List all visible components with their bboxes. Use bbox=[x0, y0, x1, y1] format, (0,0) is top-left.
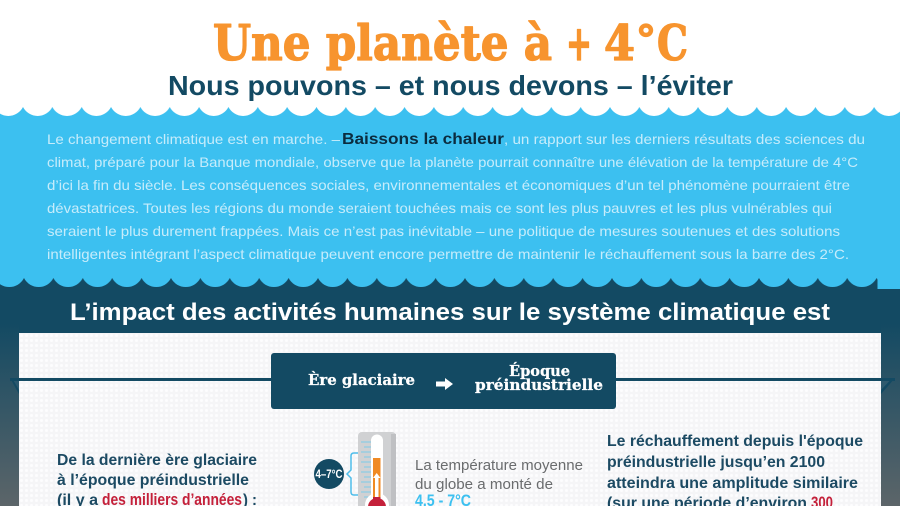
text block: right column: Le réchauffement depuis l'époque bbox=[607, 433, 863, 450]
temperature badge bbox=[314, 459, 344, 489]
icon: thermometer with 4-7 degree badge bbox=[314, 432, 396, 506]
banner label: pre-industrial era bbox=[475, 362, 603, 394]
introduction text: seraient le plus durement frappées. Mais ce n’est pas inévitable – une politique de mesures soutenues et des solutions bbox=[47, 223, 840, 239]
panel: dark impact section bbox=[0, 276, 900, 506]
icon: arrow bbox=[436, 378, 453, 390]
timeline ribbon line bbox=[10, 378, 895, 394]
text block: right column bbox=[607, 433, 863, 506]
introduction text bbox=[47, 131, 865, 262]
text block: right column: préindustrielle jusqu’en 2100 bbox=[607, 454, 825, 471]
text block: right column: atteindra une amplitude similaire bbox=[607, 475, 858, 492]
title: 4 bbox=[604, 14, 635, 72]
banner: ice age to pre-industrial era bbox=[271, 353, 616, 409]
panel: dotted white content card bbox=[19, 333, 881, 506]
section heading: L’impact des activités humaines sur le système climatique est bbox=[70, 299, 830, 326]
title: ° bbox=[636, 17, 656, 62]
introduction text: intelligentes intégrant l’aspect climatique peuvent encore permettre de maintenir le réchauffement sous la barre des 2°C. bbox=[47, 246, 849, 262]
introduction text: climat, préparé pour la Banque mondiale, observe que la planète pourrait connaître une élévation de la température de 4°C bbox=[47, 154, 858, 170]
text block: left column: De la dernière ère glaciaire bbox=[57, 452, 257, 469]
introduction text: , un rapport sur les derniers résultats des sciences du bbox=[504, 131, 865, 147]
title: C bbox=[657, 14, 688, 72]
subtitle: Nous pouvons – et nous devons – l’éviter bbox=[168, 70, 733, 101]
introduction text: dévastatrices. Toutes les régions du monde seraient touchées mais ce sont les plus pauvres et les plus vulnérables qui bbox=[47, 200, 832, 216]
introduction text: Baissons la chaleur bbox=[342, 131, 504, 148]
text block: left column bbox=[57, 452, 257, 506]
text block: temperature rise bbox=[415, 458, 583, 506]
panel: blue water introduction bbox=[0, 107, 900, 279]
text block: temperature rise: du globe a monté de bbox=[415, 477, 553, 493]
text block: temperature rise: La température moyenne bbox=[415, 458, 583, 474]
brace bbox=[347, 453, 358, 495]
introduction text: d’ici la fin du siècle. Les conséquences sociales, environnementales et économiques d’un tel phénomène pourraient être bbox=[47, 177, 850, 193]
banner label: pre-industrial era: préindustrielle bbox=[475, 377, 603, 394]
title: + bbox=[566, 14, 592, 72]
introduction text: Le changement climatique est en marche. – bbox=[47, 131, 340, 147]
banner label: ice age: Ère glaciaire bbox=[308, 371, 415, 389]
text block: left column: à l’époque préindustrielle bbox=[57, 472, 249, 489]
icon: thermometer with 4-7 degree badge: 4–7°C bbox=[316, 467, 343, 481]
title: Une planète à bbox=[213, 14, 552, 72]
banner label: pre-industrial era: Époque bbox=[509, 362, 570, 380]
